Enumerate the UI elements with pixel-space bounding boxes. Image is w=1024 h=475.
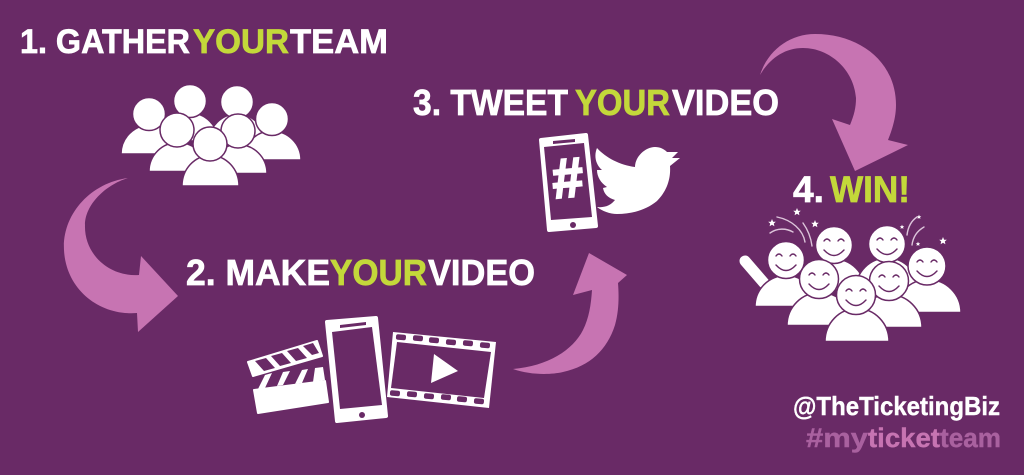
raised arm [745, 261, 764, 283]
heading: step 3: YOUR [575, 82, 670, 123]
heading: step 1 [20, 23, 388, 61]
twitter handle: @TheTicketingBiz [793, 391, 1000, 421]
icon: film strip with play button [387, 332, 496, 408]
smiling faces [776, 238, 937, 306]
icon: twitter bird [595, 147, 680, 214]
icon: clapperboard [248, 341, 328, 413]
icon: phone with hashtag: # [549, 145, 586, 210]
icon: celebrating winners [745, 208, 961, 342]
icon: smartphone [327, 318, 386, 421]
icon: team group [121, 84, 301, 186]
heading: step 4 [793, 169, 910, 210]
arrow: step 1 to step 2 [64, 178, 178, 332]
heading: step 2: YOUR [330, 252, 427, 293]
heading: step 4: WIN! [830, 169, 910, 210]
hashtag: ticket [868, 423, 940, 453]
heading: step 1: TEAM [290, 23, 388, 61]
heading: step 2: 2. MAKE [186, 252, 330, 293]
heading: step 1: 1. GATHER [20, 23, 190, 61]
hashtag: #my [806, 423, 868, 453]
arrow: step 3 to step 4 [760, 34, 908, 171]
heading: step 1: YOUR [193, 23, 289, 61]
back row people [755, 226, 961, 342]
heading: step 2: VIDEO [428, 252, 535, 293]
icon: phone with hashtag [541, 135, 596, 230]
celebration stars [768, 208, 947, 246]
heading: step 2 [186, 252, 535, 293]
heading: step 4: 4. [793, 169, 824, 210]
hashtag [806, 423, 1001, 453]
hashtag: team [940, 423, 1001, 453]
arrow: step 2 to step 3 [513, 253, 627, 374]
heading: step 3: VIDEO [672, 82, 779, 123]
celebration streamers [770, 217, 924, 246]
heading: step 3 [413, 82, 779, 123]
heading: step 3: 3. TWEET [413, 82, 568, 123]
